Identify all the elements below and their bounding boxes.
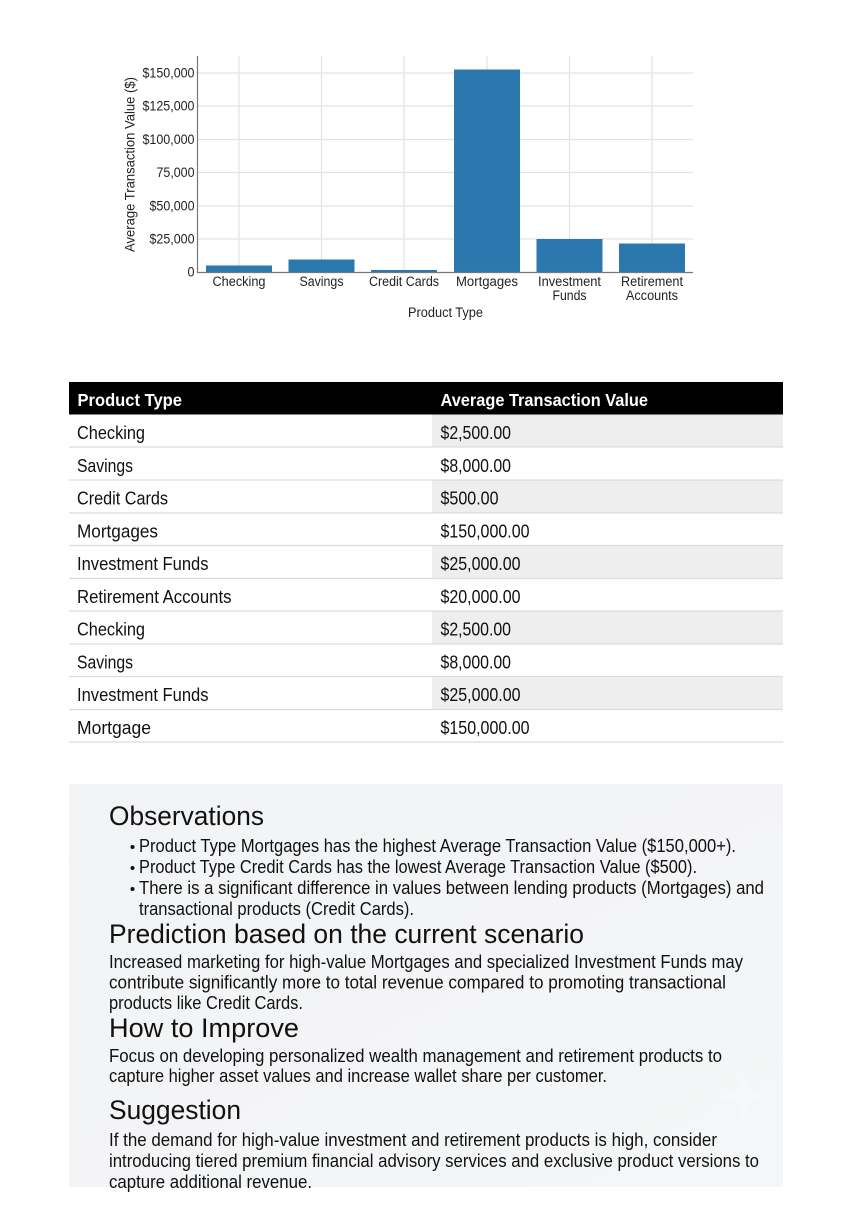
data table xyxy=(69,382,783,742)
prediction text xyxy=(109,952,743,1013)
observations list xyxy=(130,836,764,919)
y axis tick labels: $25,000 xyxy=(150,232,194,246)
x axis title: Product Type xyxy=(408,305,483,320)
table rows: $2,500.00 xyxy=(440,423,511,443)
panel: insights xyxy=(69,784,783,1192)
heading: prediction: Prediction based on the current scenario xyxy=(109,919,584,949)
suggestion text: introducing tiered premium financial advisory services and exclusive product versions to xyxy=(109,1151,759,1171)
x axis category labels: Funds xyxy=(552,288,587,303)
heading: observations: Observations xyxy=(109,801,264,831)
table header: Product Type xyxy=(78,390,182,410)
heading: how to improve: How to Improve xyxy=(109,1013,299,1043)
table header: Average Transaction Value xyxy=(440,390,648,410)
y axis tick labels: $125,000 xyxy=(142,98,194,114)
x axis category labels: Credit Cards xyxy=(369,274,439,289)
table rows: $500.00 xyxy=(440,488,498,508)
table rows: $20,000.00 xyxy=(440,587,520,607)
observations list: transactional products (Credit Cards). xyxy=(139,899,414,919)
y axis tick labels: $50,000 xyxy=(150,198,194,214)
x axis category labels xyxy=(212,274,683,303)
table rows: $8,000.00 xyxy=(440,456,511,476)
table rows: Mortgages xyxy=(77,522,158,542)
table rows: Savings xyxy=(77,652,133,672)
x axis category labels: Savings xyxy=(300,274,344,289)
table rows: $8,000.00 xyxy=(440,652,511,672)
table rows: Checking xyxy=(77,620,145,640)
improvement text: Focus on developing personalized wealth management and retirement products to xyxy=(109,1046,722,1066)
improvement text xyxy=(109,1046,722,1086)
y axis tick labels: $100,000 xyxy=(142,132,194,147)
table header xyxy=(69,382,783,414)
table rows: $25,000.00 xyxy=(440,554,520,574)
x axis category labels: Mortgages xyxy=(456,274,518,289)
prediction text: Increased marketing for high-value Mortgages and specialized Investment Funds may xyxy=(109,952,743,972)
table rows: $150,000.00 xyxy=(440,522,530,542)
x axis category labels: Checking xyxy=(212,274,266,289)
table rows xyxy=(77,423,530,738)
y axis tick labels: 75,000 xyxy=(156,165,194,180)
improvement text: capture higher asset values and increase wallet share per customer. xyxy=(109,1066,607,1086)
table rows: Mortgage xyxy=(77,718,151,738)
table rows: $150,000.00 xyxy=(440,718,530,738)
observations list: Product Type Mortgages has the highest Average Transaction Value ($150,000+). xyxy=(139,836,736,856)
heading: suggestion: Suggestion xyxy=(109,1095,241,1125)
table rows: Retirement Accounts xyxy=(77,587,232,607)
observations list: There is a significant difference in values between lending products (Mortgages) and xyxy=(139,878,764,898)
x axis category labels: Accounts xyxy=(626,288,678,303)
table rows: Investment Funds xyxy=(77,554,208,574)
table rows: Credit Cards xyxy=(77,488,168,508)
suggestion text xyxy=(109,1130,759,1192)
y axis title: Average Transaction Value ($) xyxy=(122,77,138,252)
suggestion text: capture additional revenue. xyxy=(109,1172,312,1192)
prediction text: contribute significantly more to total revenue compared to promoting transactional xyxy=(109,972,726,992)
y axis tick labels: $150,000 xyxy=(142,66,194,80)
suggestion text: If the demand for high-value investment and retirement products is high, consider xyxy=(109,1130,717,1150)
table rows: Checking xyxy=(77,423,145,443)
prediction text: products like Credit Cards. xyxy=(109,993,303,1013)
table rows: Savings xyxy=(77,456,133,476)
x axis category labels: Investment xyxy=(538,274,601,289)
table rows: $25,000.00 xyxy=(440,685,520,705)
y axis tick labels: 0 xyxy=(188,264,194,280)
bar chart: average transaction value by product type xyxy=(122,56,693,320)
y axis tick labels xyxy=(142,66,194,280)
bars xyxy=(206,70,685,272)
observations list: Product Type Credit Cards has the lowest Average Transaction Value ($500). xyxy=(139,857,697,877)
table rows: Investment Funds xyxy=(77,685,208,705)
table rows: $2,500.00 xyxy=(440,620,511,640)
x axis category labels: Retirement xyxy=(621,274,683,289)
